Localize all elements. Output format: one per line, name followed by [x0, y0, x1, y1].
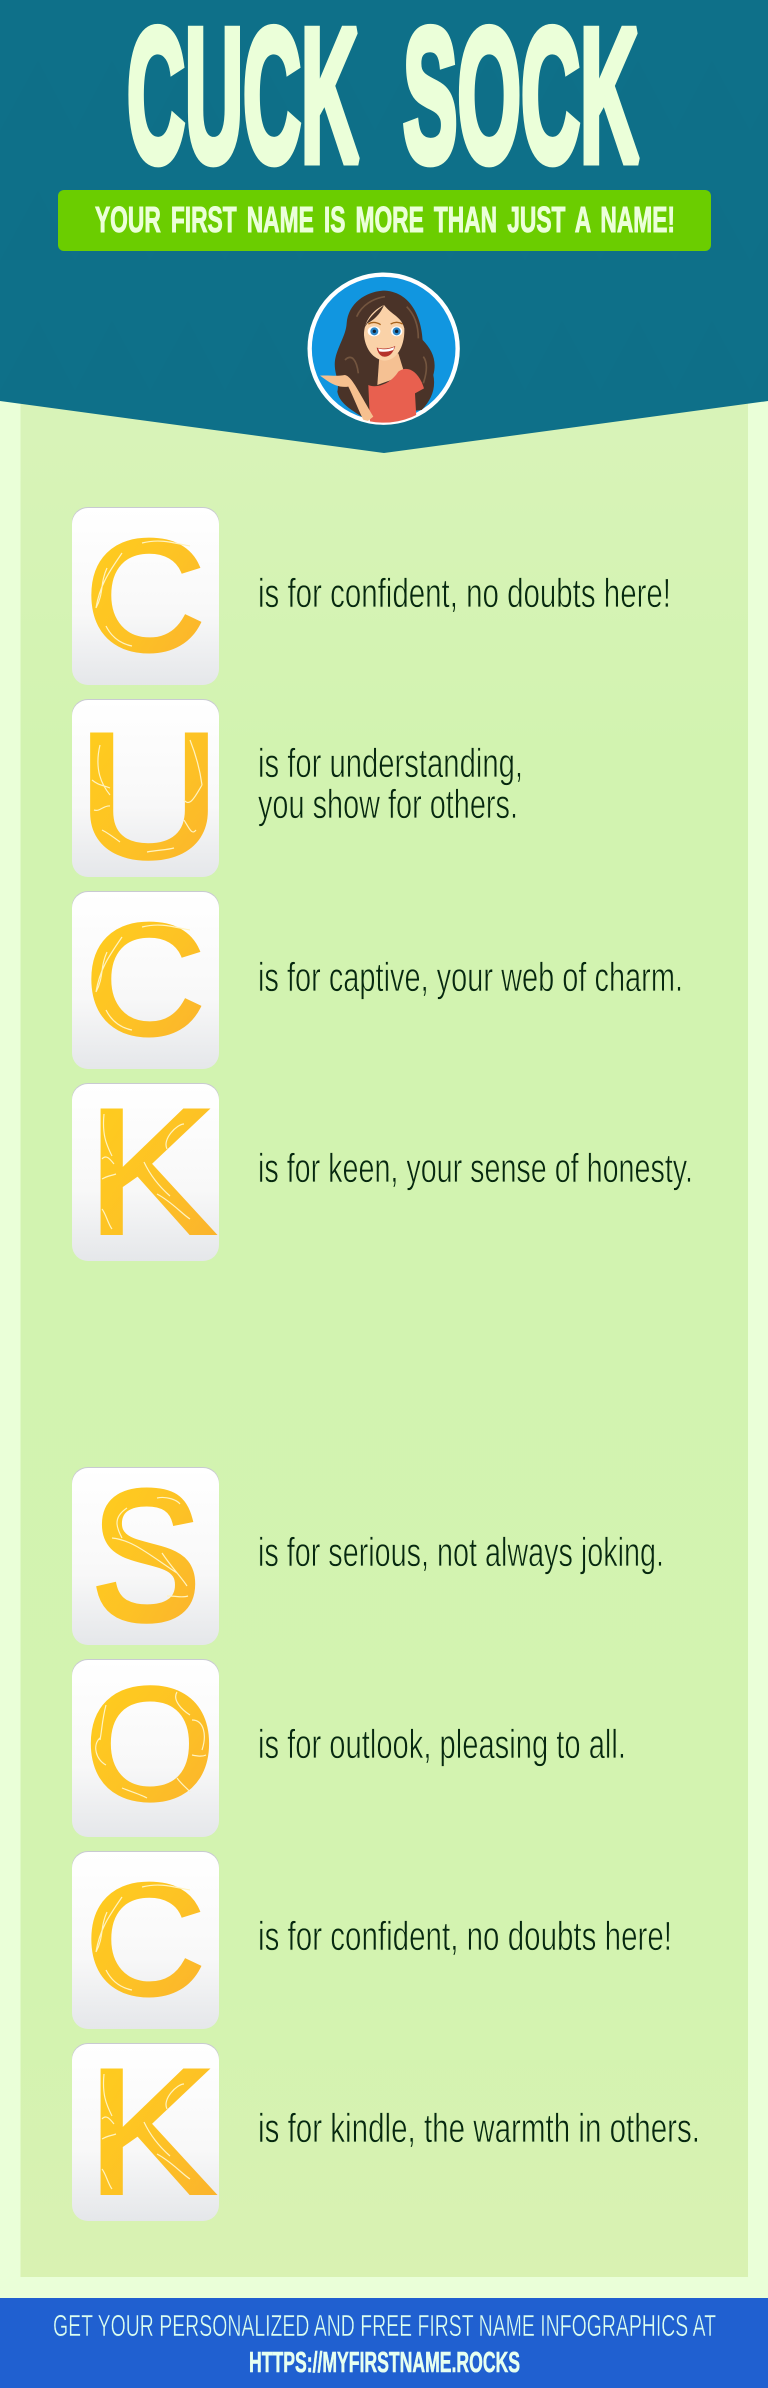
letter row: U understanding [72, 696, 523, 895]
panel: letters background [20, 380, 748, 2277]
letter row: K keen [72, 1072, 693, 1271]
tile: C: C [85, 892, 205, 1068]
letter row: O outlook [72, 1654, 626, 1837]
tile: K: K [87, 1072, 215, 1271]
text: understanding, two lines: is for understanding, [258, 740, 523, 786]
icon: woman avatar [310, 275, 458, 423]
letter row: K kindle [72, 2032, 700, 2231]
letter row: S serious [72, 1452, 664, 1658]
footer url: HTTPS://MYFIRSTNAME.ROCKS [249, 2347, 520, 2379]
footer [0, 2298, 768, 2388]
tile: S: S [92, 1452, 200, 1658]
panel: header [0, 0, 768, 453]
tile: U: U [77, 696, 221, 895]
text: understanding, two lines [258, 740, 523, 827]
tile: K: K [87, 2032, 215, 2231]
header chevron background [0, 0, 768, 453]
text: understanding, two lines: you show for others. [258, 781, 518, 827]
letter row: C captive [72, 891, 683, 1069]
letter row: C confident [72, 507, 671, 685]
text: outlook: is for outlook, pleasing to all. [258, 1721, 626, 1767]
subtitle banner [58, 190, 711, 251]
tile: C: C [85, 508, 205, 684]
letter row: C confident second [72, 1851, 672, 2029]
tile: O: O [85, 1654, 215, 1833]
tile: C: C [85, 1852, 205, 2028]
